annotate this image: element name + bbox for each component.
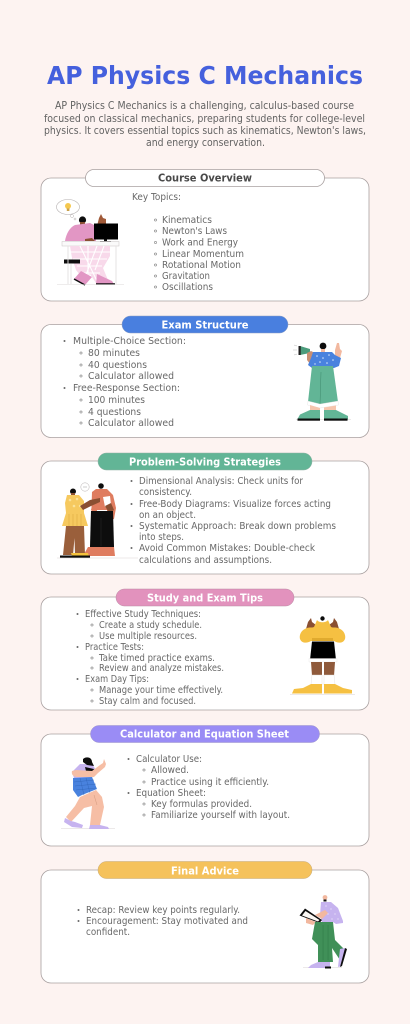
heading: study and exam tips — [116, 589, 294, 606]
heading: calculator and equation sheet: Calculator and Equation Sheet — [120, 728, 289, 740]
text: strategies: into steps. — [139, 532, 184, 543]
text: calculator and equation sheet: Practice using it efficiently. — [151, 777, 269, 788]
text: strategies: Avoid Common Mistakes: Double-check — [139, 543, 315, 554]
text: exam sections: Calculator allowed — [88, 371, 174, 382]
intro text block: and energy conservation. — [146, 137, 265, 149]
title: AP Physics C Mechanics — [47, 61, 363, 90]
panel: calculator and equation sheet — [41, 726, 369, 846]
text: key topics: Gravitation — [162, 271, 210, 282]
intro text block: focused on classical mechanics, preparing students for college-level — [44, 113, 365, 125]
heading: final advice — [98, 862, 312, 878]
text: exam sections: Free-Response Section: — [73, 383, 180, 394]
text: strategies: Free-Body Diagrams: Visualize forces acting — [139, 499, 331, 510]
text: study tips: Create a study schedule. — [99, 620, 202, 631]
icon: person with tablet — [300, 895, 347, 968]
text: strategies: on an object. — [139, 510, 196, 521]
text: final advice — [78, 905, 248, 938]
icon: person giving thumbs up — [290, 616, 355, 694]
text: strategies: consistency. — [139, 487, 192, 498]
text: exam sections: 4 questions — [88, 407, 141, 418]
heading: problem-solving strategies: Problem-Solving Strategies — [129, 456, 281, 468]
text: study tips — [76, 609, 224, 707]
heading: study and exam tips: Study and Exam Tips — [147, 592, 263, 604]
icon: student at desk with lightbulb thought — [56, 200, 124, 285]
icon: person with megaphone — [293, 343, 351, 421]
text: exam sections: 100 minutes — [88, 395, 145, 406]
text: calculator and equation sheet: Key formulas provided. — [151, 799, 252, 810]
text: strategies — [130, 476, 336, 566]
panel: final advice — [41, 862, 369, 983]
text: key topics: Work and Energy — [162, 238, 238, 248]
text: calculator and equation sheet: Allowed. — [151, 765, 189, 776]
text: study tips: Exam Day Tips: — [85, 674, 149, 685]
text: key topics: Key Topics: — [132, 192, 181, 203]
text: study tips: Take timed practice exams. — [98, 653, 215, 664]
heading: exam structure — [122, 316, 288, 333]
heading: problem-solving strategies — [98, 453, 312, 470]
icon: two people discussing — [57, 483, 138, 558]
text: study tips: Stay calm and focused. — [99, 696, 196, 707]
text: calculator and equation sheet: Familiarize yourself with layout. — [151, 810, 290, 821]
text: calculator and equation sheet: Equation Sheet: — [136, 788, 206, 799]
heading: course overview: Course Overview — [158, 172, 252, 184]
text: key topics: Linear Momentum — [162, 249, 244, 260]
text: strategies: Dimensional Analysis: Check units for — [139, 476, 304, 487]
panel: course overview — [41, 170, 369, 301]
heading: course overview — [86, 170, 324, 186]
text: final advice: Encouragement: Stay motivated and — [86, 916, 248, 927]
text: final advice: Recap: Review key points regularly. — [86, 905, 240, 916]
heading: exam structure: Exam Structure — [162, 318, 248, 332]
text: study tips: Effective Study Techniques: — [85, 609, 201, 620]
text: exam sections: Multiple-Choice Section: — [73, 336, 186, 347]
text: exam sections: 80 minutes — [88, 348, 140, 359]
intro text block — [44, 100, 366, 149]
text: key topics: Kinematics — [162, 215, 212, 226]
text: calculator and equation sheet — [128, 754, 290, 821]
panel: problem-solving strategies — [41, 453, 369, 574]
heading: calculator and equation sheet — [90, 726, 320, 742]
text: key topics: Rotational Motion — [162, 260, 241, 271]
heading: final advice: Final Advice — [171, 864, 239, 878]
intro text block: AP Physics C Mechanics is a challenging, calculus-based course — [55, 100, 354, 112]
text: study tips: Manage your time effectively. — [99, 685, 223, 696]
text: study tips: Practice Tests: — [85, 642, 144, 653]
intro text block: physics. It covers essential topics such as kinematics, Newton's laws, — [44, 125, 366, 137]
text: final advice: confident. — [86, 927, 130, 938]
text: strategies: Systematic Approach: Break down problems — [139, 521, 336, 532]
text: key topics: Newton's Laws — [162, 226, 227, 237]
text: key topics — [132, 192, 244, 293]
text: exam sections — [64, 336, 186, 429]
text: study tips: Review and analyze mistakes. — [99, 663, 224, 674]
text: study tips: Use multiple resources. — [99, 631, 197, 642]
panel: study and exam tips — [41, 589, 369, 710]
text: strategies: calculations and assumptions. — [139, 555, 272, 566]
icon: walking person — [61, 757, 115, 829]
text: key topics: Oscillations — [162, 282, 213, 293]
text: exam sections: 40 questions — [88, 360, 147, 371]
text: calculator and equation sheet: Calculator Use: — [136, 754, 202, 765]
panel: exam structure — [41, 316, 369, 438]
text: exam sections: Calculator allowed — [88, 418, 174, 429]
